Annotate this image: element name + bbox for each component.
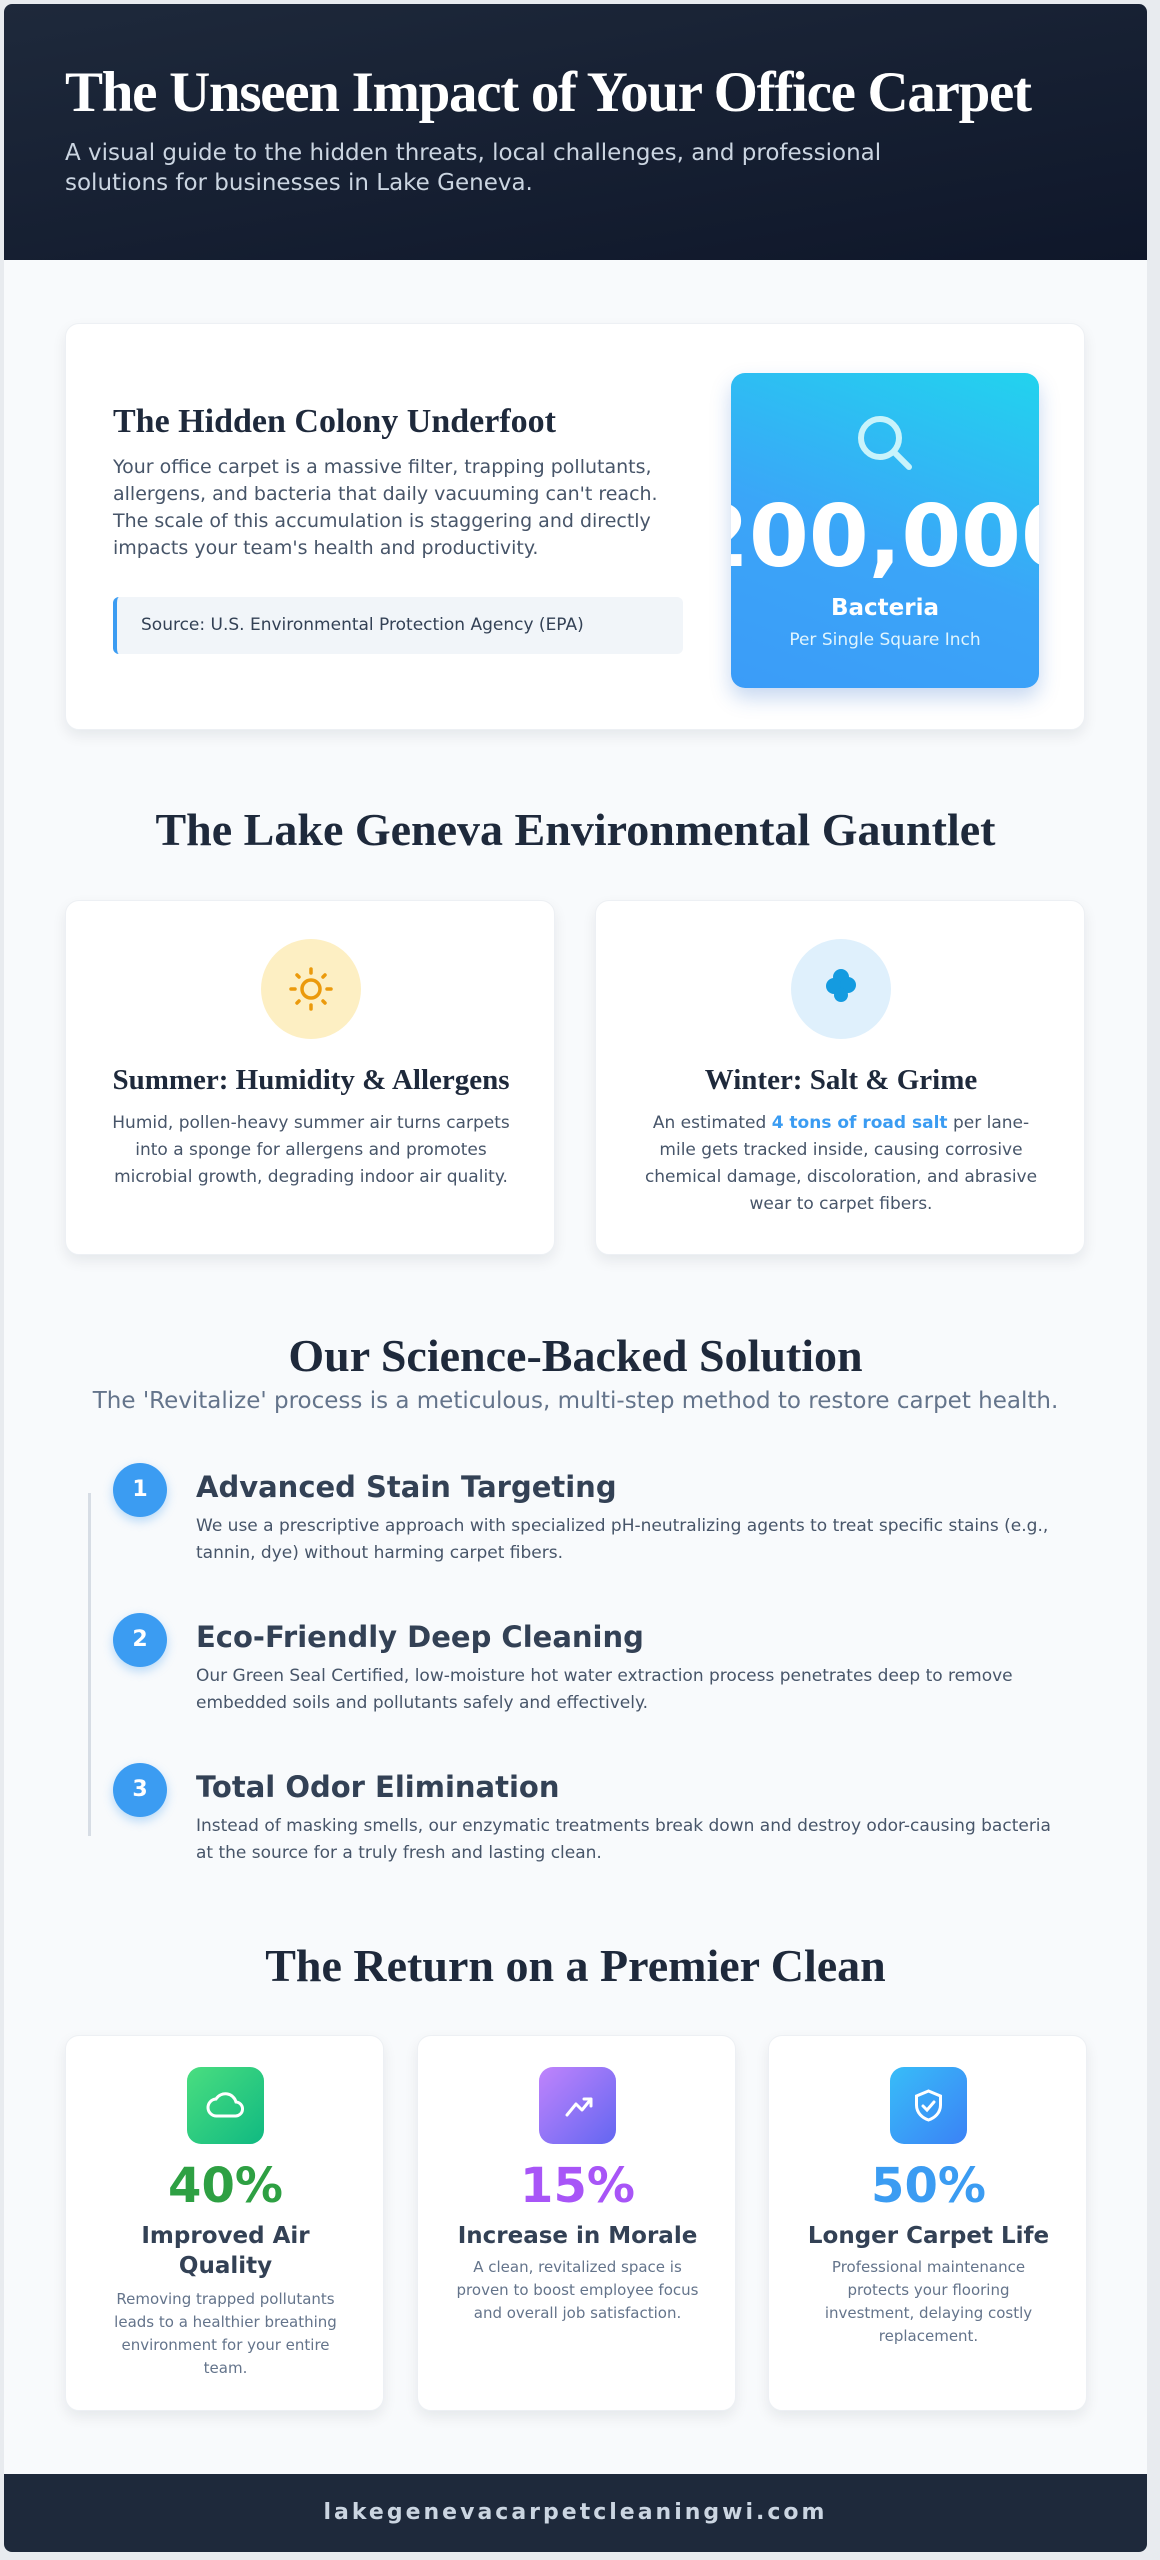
- step 2: Eco-Friendly Deep Cleaning: [196, 1620, 644, 1654]
- source callout: [113, 597, 683, 654]
- panel: morale: [417, 2035, 736, 2411]
- title: The Unseen Impact of Your Office Carpet: [65, 61, 1031, 124]
- step 3: Total Odor Elimination: [196, 1770, 560, 1804]
- step 1: [108, 1462, 1048, 1563]
- icon: trend: [539, 2067, 616, 2144]
- panel: winter: [595, 900, 1085, 1255]
- step 2: 2: [132, 1627, 148, 1652]
- section heading: return: The Return on a Premier Clean: [265, 1940, 886, 1991]
- step 1: Advanced Stain Targeting: [196, 1470, 617, 1504]
- text: A clean, revitalized space is proven to boost employee focus and overall job satisfaction.: [457, 2258, 698, 2322]
- heading: Summer: Humidity & Allergens: [112, 1064, 510, 1096]
- label: Improved Air Quality: [141, 2223, 310, 2279]
- step 2: Our Green Seal Certified, low-moisture hot water extraction process penetrates deep to remove embedded soils and pollutants safely and effectively.: [196, 1666, 1013, 1713]
- heading: Winter: Salt & Grime: [705, 1064, 977, 1096]
- icon: cloud: [187, 2067, 264, 2144]
- stat: 50%: [871, 2158, 986, 2214]
- footer: [4, 2474, 1147, 2552]
- panel: summer: [65, 900, 555, 1255]
- text: An estimated 4 tons of road salt per lane-mile gets tracked inside, causing corrosive chemical damage, discoloration, and abrasive wear to carpet fibers.: [645, 1113, 1037, 1214]
- step 3: Instead of masking smells, our enzymatic treatments break down and destroy odor-causing bacteria at the source for a truly fresh and lasting clean.: [196, 1816, 1051, 1863]
- source callout: Source: U.S. Environmental Protection Agency (EPA): [141, 615, 584, 635]
- section subtitle: The 'Revitalize' process is a meticulous, multi-step method to restore carpet health.: [93, 1388, 1058, 1414]
- panel: hidden colony: [65, 323, 1085, 730]
- panel: air quality: [65, 2035, 384, 2411]
- stat: 40%: [168, 2158, 283, 2214]
- text: Humid, pollen-heavy summer air turns carpets into a sponge for allergens and promotes microbial growth, degrading indoor air quality.: [112, 1113, 510, 1187]
- step 1: We use a prescriptive approach with specialized pH-neutralizing agents to treat specific stains (e.g., tannin, dye) without harming carpet fibers.: [196, 1516, 1048, 1563]
- footer: lakegenevacarpetcleaningwi.com: [324, 2500, 827, 2525]
- icon: shield: [890, 2067, 967, 2144]
- header: [4, 4, 1147, 260]
- step 3: 3: [132, 1777, 148, 1802]
- step 2: [108, 1612, 1013, 1713]
- sublabel: Per Single Square Inch: [789, 630, 981, 650]
- label: Longer Carpet Life: [808, 2223, 1049, 2249]
- icon: magnifier: [858, 416, 912, 470]
- steps timeline: [88, 1462, 1051, 1863]
- label: Increase in Morale: [458, 2223, 697, 2249]
- icon: sun: [261, 939, 361, 1039]
- stat box: [731, 373, 1039, 688]
- text: Professional maintenance protects your flooring investment, delaying costly replacement.: [825, 2258, 1032, 2345]
- text: Removing trapped pollutants leads to a healthier breathing environment for your entire team.: [114, 2290, 337, 2377]
- panel: carpet life: [768, 2035, 1087, 2411]
- label: Bacteria: [831, 595, 939, 621]
- icon: snow/salt: [791, 939, 891, 1039]
- step 3: [108, 1762, 1051, 1863]
- section heading: solution: Our Science-Backed Solution: [288, 1330, 863, 1381]
- step 1: 1: [132, 1477, 148, 1502]
- text block: Your office carpet is a massive filter, trapping pollutants, allergens, and bacteria that daily vacuuming can't reach. The scale of this accumulation is staggering and directly impacts your team's health and productivity.: [113, 456, 658, 559]
- section heading: gauntlet: The Lake Geneva Environmental Gauntlet: [156, 804, 995, 855]
- heading: The Hidden Colony Underfoot: [113, 403, 556, 440]
- subtitle: A visual guide to the hidden threats, local challenges, and professional solutions for businesses in Lake Geneva.: [65, 140, 881, 196]
- stat: 15%: [520, 2158, 635, 2214]
